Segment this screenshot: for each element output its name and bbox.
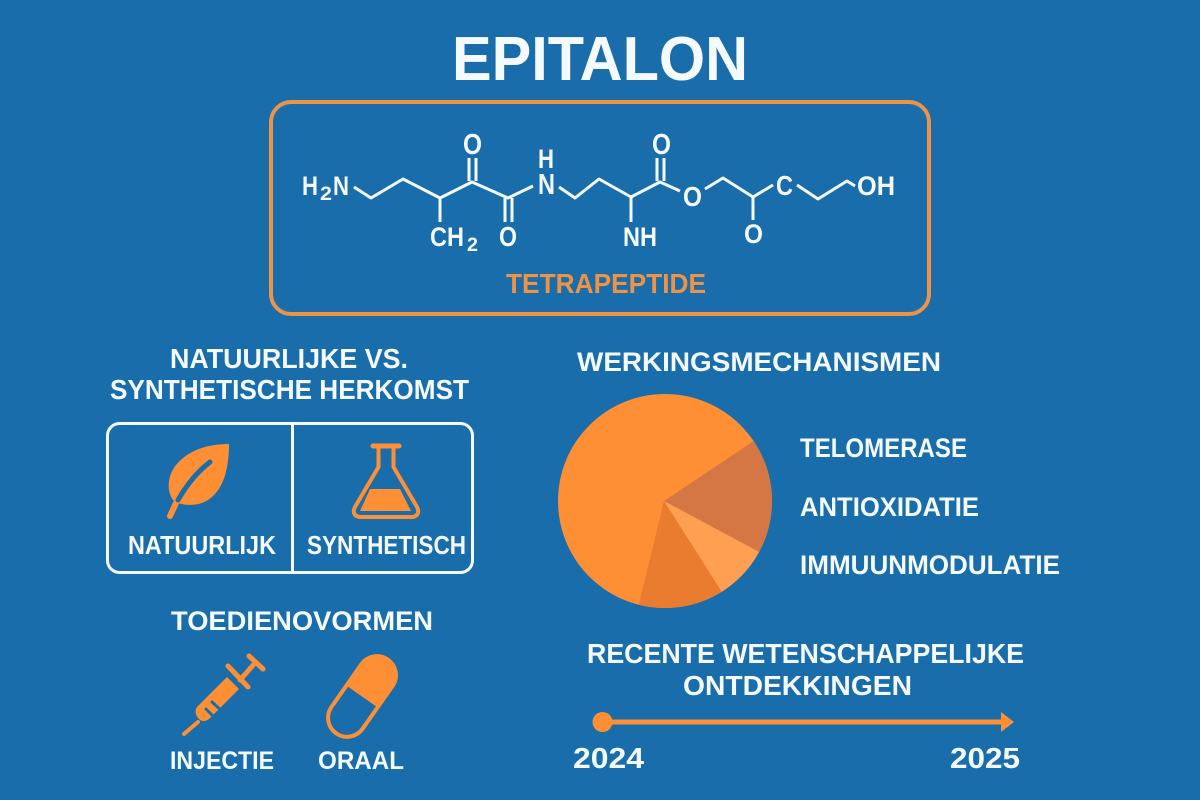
pie legend: TELOMERASE (800, 433, 967, 463)
pie legend: IMMUUNMODULATIE (800, 550, 1060, 580)
label: 2025: 2025 (950, 743, 1020, 775)
panel: molecule structure (271, 102, 929, 314)
molecule atom labels: O (652, 129, 671, 161)
heading: origin: NATUURLIJKE VS. (170, 343, 408, 374)
molecule bonds (354, 158, 855, 222)
icon: leaf (169, 444, 229, 516)
pie chart (558, 394, 772, 608)
heading: recent discoveries: ONTDEKKINGEN (683, 670, 912, 701)
heading: mechanisms: WERKINGSMECHANISMEN (577, 347, 941, 377)
molecule caption: TETRAPEPTIDE (506, 268, 706, 299)
label: natural: NATUURLIJK (128, 530, 276, 560)
timeline arrow (592, 712, 1014, 732)
pie legend (800, 433, 1060, 580)
molecule atom labels: O (683, 181, 702, 212)
molecule atom labels: O (463, 129, 482, 161)
label: 2024: 2024 (573, 743, 644, 775)
pie legend: ANTIOXIDATIE (800, 492, 979, 522)
icon: flask (354, 446, 418, 517)
panel: natural vs synthetic (108, 423, 472, 573)
heading: recent discoveries (587, 638, 1024, 701)
molecule atom labels: O (499, 221, 517, 252)
label: oral: ORAAL (318, 747, 404, 775)
icon: syringe (184, 656, 263, 734)
molecule atom labels (302, 129, 895, 256)
label: synthetic: SYNTHETISCH (307, 530, 466, 560)
molecule atom labels: H (302, 171, 318, 201)
molecule atom labels: OH (857, 171, 895, 201)
molecule atom labels: N (333, 171, 349, 201)
molecule atom labels: H (538, 144, 554, 174)
molecule atom labels: 2 (467, 235, 478, 256)
title: EPITALON (452, 25, 748, 94)
label: injection: INJECTIE (170, 747, 274, 775)
molecule atom labels: N (538, 169, 555, 201)
molecule atom labels: CH (430, 222, 464, 252)
heading: origin (110, 343, 469, 405)
molecule atom labels: 2 (320, 184, 332, 205)
molecule atom labels: O (744, 219, 763, 249)
molecule atom labels: C (776, 170, 793, 201)
heading: administration forms: TOEDIENOVORMEN (171, 606, 433, 636)
heading: recent discoveries: RECENTE WETENSCHAPPELIJKE (587, 638, 1024, 669)
molecule atom labels: NH (623, 222, 657, 252)
heading: origin: SYNTHETISCHE HERKOMST (110, 374, 469, 405)
icon: capsule (321, 649, 403, 744)
